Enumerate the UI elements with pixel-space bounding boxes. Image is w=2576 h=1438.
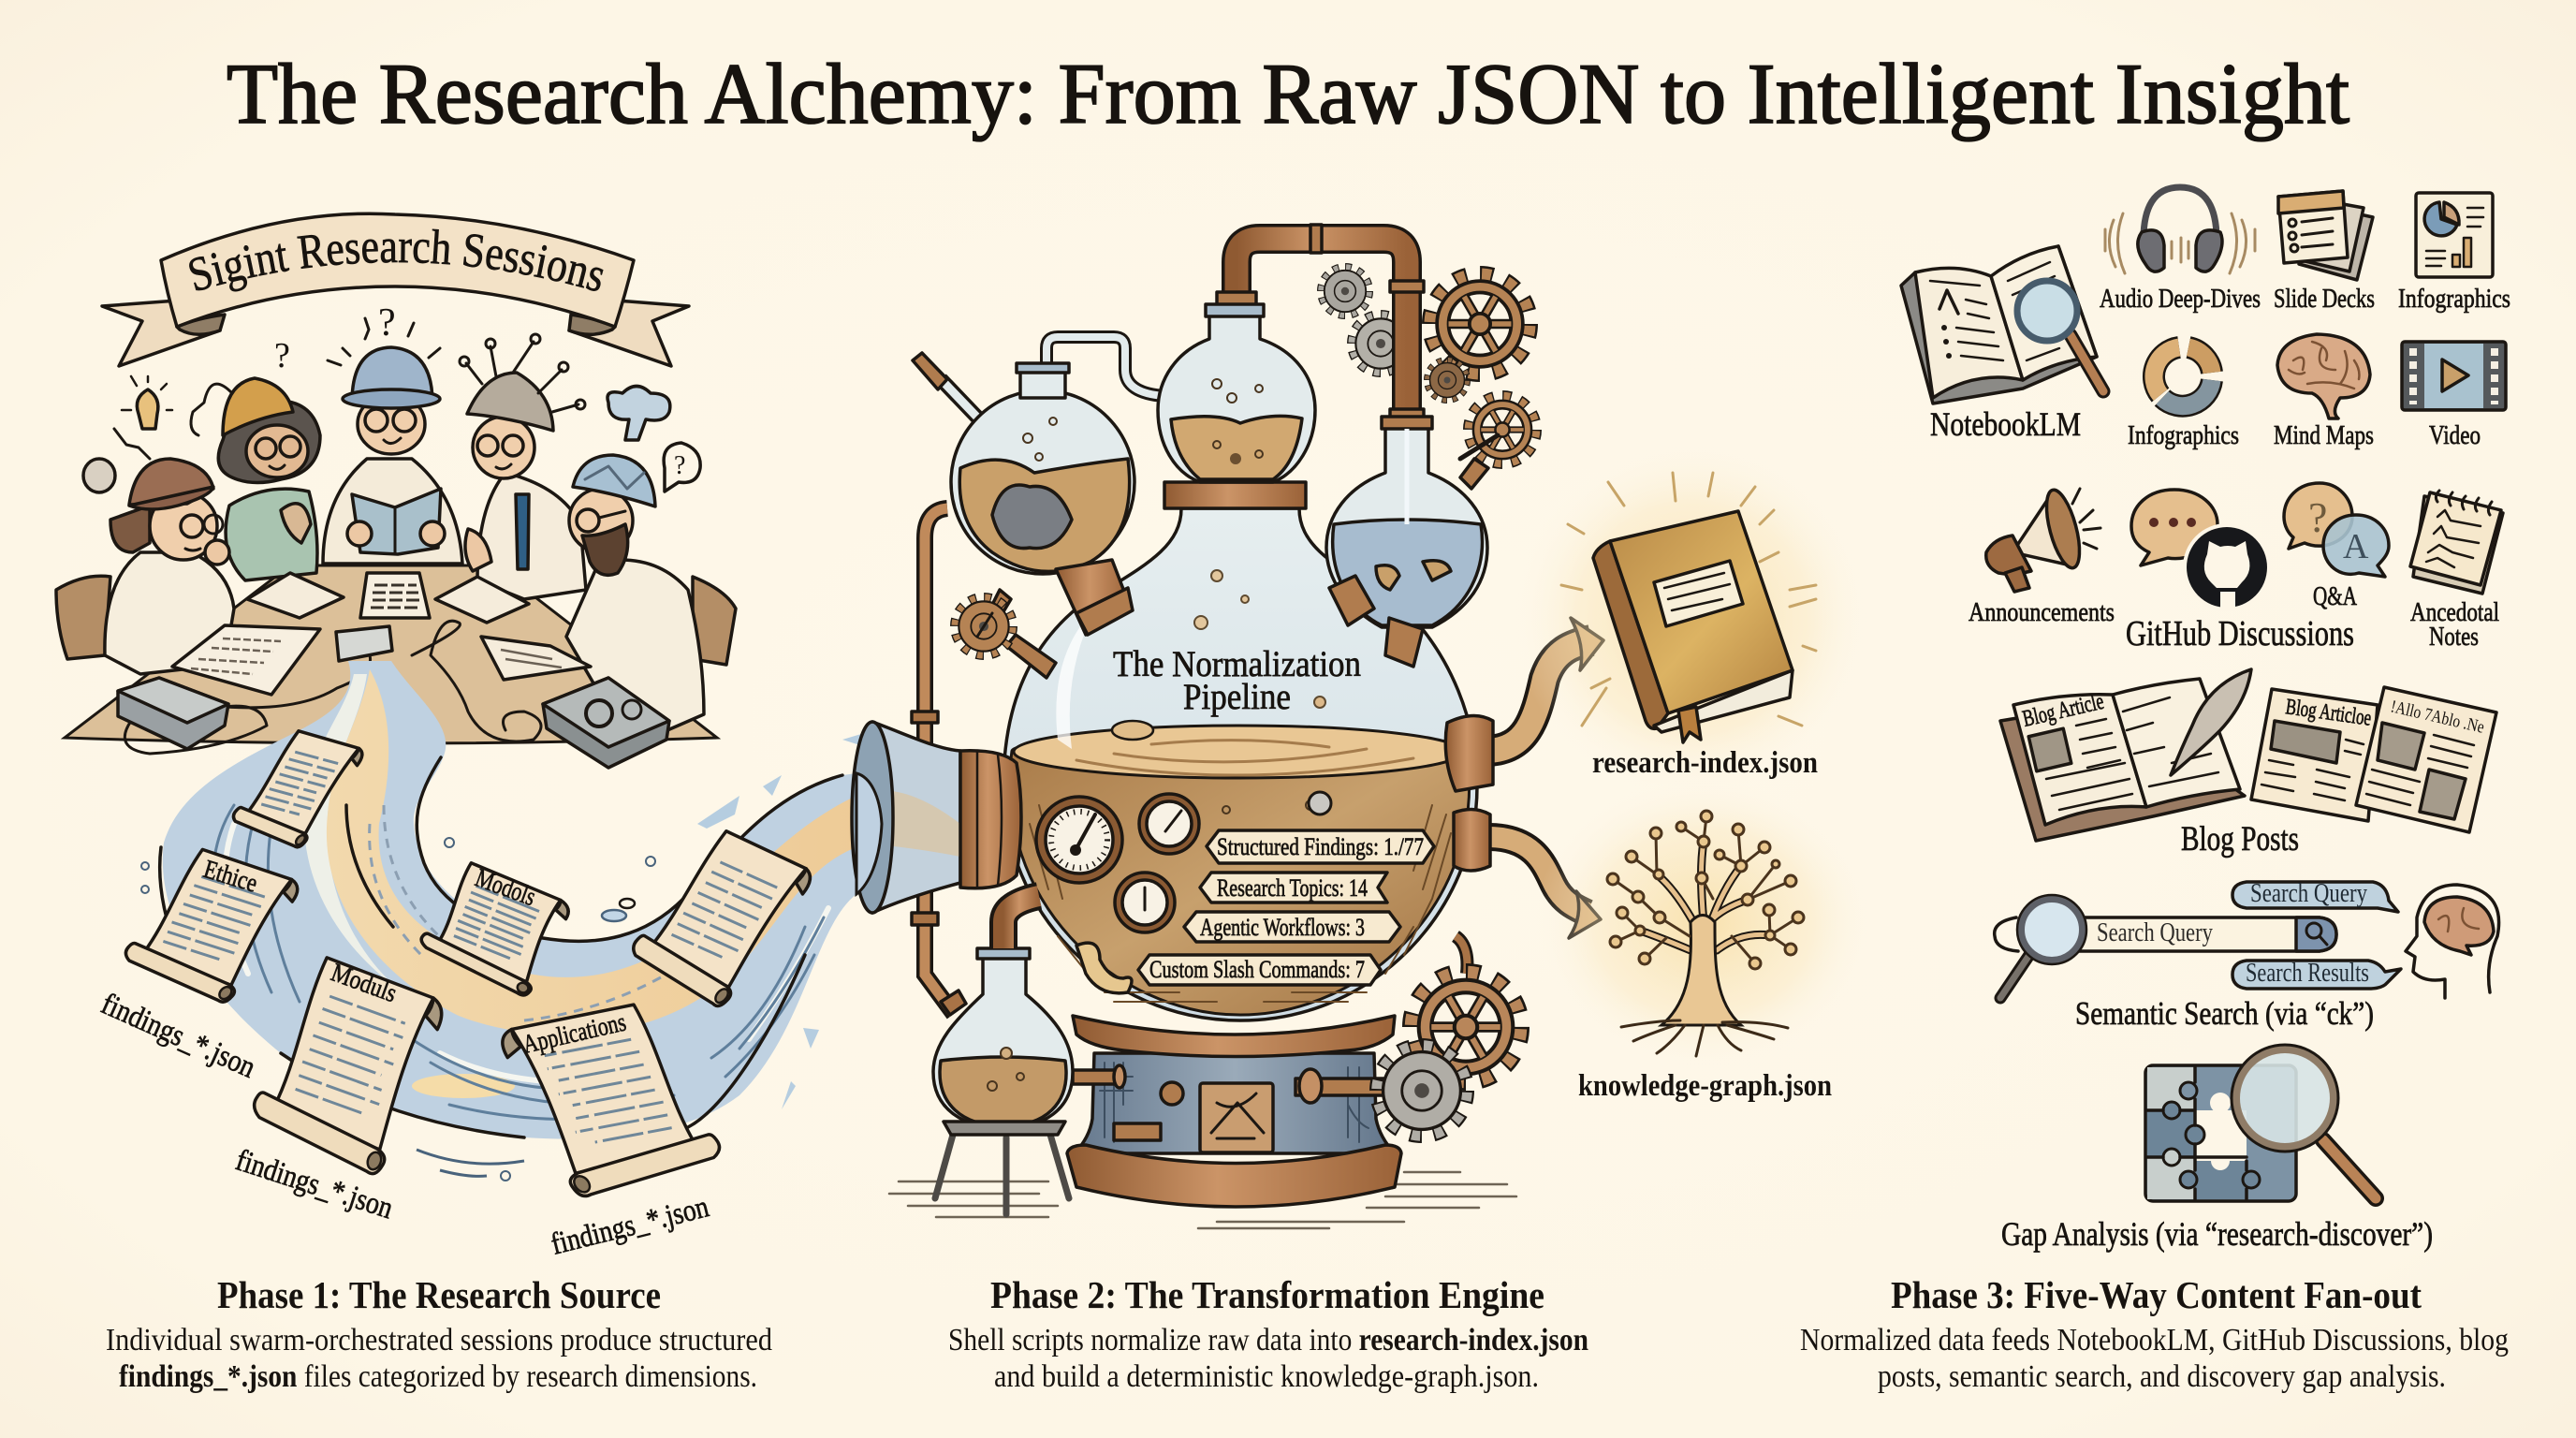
main flask label [1113,644,1361,717]
caption: phase 1: findings_*.json files categorized by research dimensions. [119,1359,757,1394]
scroll: Modols [416,857,573,1000]
icon: blog open book with quill: Blog Article [2020,689,2106,732]
researcher 4: gray helmet with antennae [460,334,586,599]
left flask with ore [913,353,1134,635]
intake funnel [852,722,1021,913]
label: knowledge-graph.json: knowledge-graph.json [1578,1069,1832,1103]
icon: NotebookLM open book and magnifier [1901,246,2103,404]
scroll: Applications [495,1001,730,1199]
panel: transformation engine [852,225,1872,1228]
glass connector pipe [1046,337,1164,396]
icon: megaphone [1986,487,2100,592]
icon: brain [2277,334,2370,418]
data stream [141,661,880,1181]
stat banners [1138,830,1434,985]
thought icons above the researchers [83,301,700,492]
label: Ancedotal Notes [2410,597,2499,652]
base emblem [1200,1083,1273,1152]
label: Announcements: Announcements [1969,597,2115,627]
copper top pipe [1217,225,1424,423]
label: Slide Decks: Slide Decks [2274,284,2375,314]
icon: GitHub discussions bubble and mark [2131,490,2271,611]
right flask [1326,417,1488,667]
main flask label: Pipeline [1183,677,1291,717]
scroll: Ethice: Ethice [200,855,260,899]
caption: phase 1: Phase 1: The Research Source [217,1273,661,1316]
researcher 5: bearded scientist [566,455,704,740]
label: Audio Deep-Dives: Audio Deep-Dives [2100,284,2261,314]
base plate upper [1073,1016,1395,1056]
thought icons above the researchers: ? [274,336,290,375]
icon: video film strip [2402,342,2506,410]
icon: search bar with magnifier: Search Query [2097,918,2213,947]
base body [1075,1053,1395,1153]
base plate lower [1067,1145,1401,1207]
stat: custom slash commands: Custom Slash Commands: 7 [1149,956,1365,983]
stat: structured findings [1207,830,1434,863]
icon: puzzle with magnifier [2145,1045,2376,1201]
scroll: Ethice [116,844,304,1005]
icon: blog article sheet: Blog Articloe [2284,695,2373,731]
title: The Research Alchemy: From Raw JSON to Intelligent Insight [227,46,2349,141]
caption: phase 2 [948,1273,1588,1394]
scroll: Moduls: Moduls [328,958,401,1008]
icon: donut chart [2154,347,2212,406]
label: Ancedotal Notes: Notes [2429,622,2479,652]
label: Gap Analysis: Gap Analysis (via “research-discover”) [2001,1215,2433,1253]
label: Video: Video [2429,420,2481,450]
caption: phase 2: and build a deterministic knowledge-graph.json. [994,1359,1539,1394]
main flask label: The Normalization [1113,644,1361,684]
banner: Sigint Research Sessions [100,212,691,368]
bubble: search results: Search Results [2246,959,2369,988]
main flask [1003,482,1477,1020]
icon: article sheet with images: !Allo 7Ablo .Ne [2389,697,2486,738]
icon: search bar with magnifier [1995,895,2336,998]
icon: anecdotal notepad [2410,491,2503,594]
caption: phase 1 [106,1273,772,1394]
stat: agentic workflows: Agentic Workflows: 3 [1200,914,1365,941]
file labels: findings_*.json [96,987,260,1085]
caption: phase 2: Shell scripts normalize raw data into research-index.json [948,1323,1588,1357]
label: research-index.json: research-index.json [1592,746,1818,780]
table papers and open book [172,573,591,695]
label: GitHub Discussions: GitHub Discussions [2126,614,2354,653]
file labels: findings_*.json [232,1143,397,1225]
icon: slide decks [2278,191,2373,280]
caption: phase 3: posts, semantic search, and discovery gap analysis. [1878,1359,2446,1394]
researcher 2: gold helmet [191,378,320,580]
small flask on stand [933,896,1073,1214]
icon: Q and A bubbles: ? [2308,493,2327,541]
scroll: unlabelled top [226,728,367,849]
icon: blog article sheet [2251,689,2378,821]
file labels [96,987,712,1262]
file labels: findings_*.json [548,1190,712,1262]
thought icons above the researchers: ? [378,301,396,345]
icon: headphones with sound waves [2105,187,2255,273]
outlet arrow to knowledge-graph [1454,809,1601,938]
icon: infographic document [2416,193,2493,277]
icon: article sheet with images [2356,687,2496,832]
gauges [1036,794,1199,993]
output: research-index book [1515,440,1870,796]
scroll: right [622,825,817,1010]
icon: head silhouette with brain [2406,885,2499,998]
scroll: Modols: Modols [472,863,539,912]
label: Mind Maps: Mind Maps [2274,420,2374,450]
scroll: Applications: Applications [520,1007,629,1060]
label: Infographics: Infographics [2398,284,2510,314]
pressure gear gauge [955,590,1056,678]
devices and wires [118,621,669,768]
label: NotebookLM: NotebookLM [1930,405,2081,443]
caption: phase 3 [1800,1273,2509,1394]
icon: blog open book with quill [2000,669,2251,841]
label: Blog Posts: Blog Posts [2181,820,2299,858]
stat: research topics: Research Topics: 14 [1217,874,1368,902]
banner: Sigint Research Sessions: Sigint Research Sessions [189,228,604,292]
table and chairs [56,565,736,743]
icon: Q and A bubbles [2284,483,2389,577]
stat: structured findings: Structured Findings: 1./77 [1217,833,1424,860]
caption: phase 2: Phase 2: The Transformation Engine [990,1273,1544,1316]
gears: lower right [1377,936,1520,1136]
bubble: search query: Search Query [2250,879,2367,908]
panel: content fan-out [1901,187,2510,1253]
ground hatching [889,1172,1516,1228]
label: Q&A: Q&A [2313,582,2358,611]
output: knowledge-graph tree [1535,777,1872,1067]
upper flask [1158,304,1315,482]
gears: upper right [1321,267,1536,463]
caption: phase 1: Individual swarm-orchestrated sessions produce structured [106,1323,772,1357]
researcher 3: reading blue book [323,347,462,564]
apparatus base [1067,1016,1401,1207]
thought icons above the researchers: ? [674,451,685,480]
label: Semantic Search: Semantic Search (via “ck”) [2075,995,2374,1032]
researcher 1: brown helmet [105,459,234,674]
icon: Q and A bubbles: A [2343,527,2369,566]
panel: research source illustration [54,212,861,1262]
caption: phase 3: Phase 3: Five-Way Content Fan-out [1891,1273,2422,1316]
label: Infographics second: Infographics [2128,420,2239,450]
label: Ancedotal Notes: Ancedotal [2410,597,2499,627]
outlet arrow to research-index [1445,618,1603,791]
copper feed pipe [912,508,966,1015]
scroll: Moduls [245,951,447,1179]
